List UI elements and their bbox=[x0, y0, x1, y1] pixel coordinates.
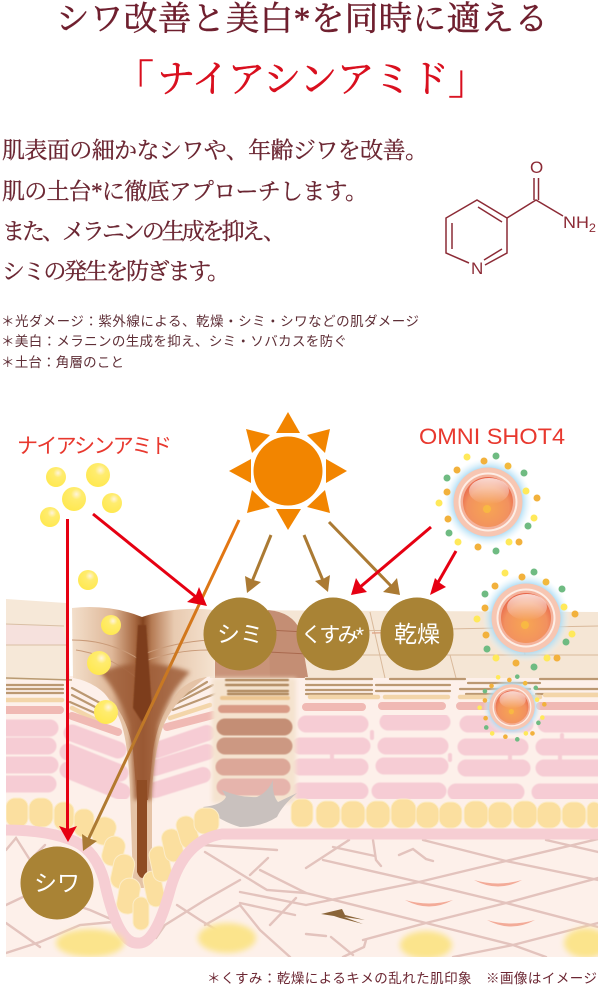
circle: シワ bbox=[20, 846, 94, 920]
footer note: ＊くすみ：乾燥によるキメの乱れた肌印象 ※画像はイメージ bbox=[207, 971, 597, 986]
subtitle: ナイアシンアミド: 「 bbox=[113, 57, 154, 103]
horny layer cells left bbox=[6, 599, 72, 680]
arrow: sun to くすみ bbox=[304, 535, 330, 592]
body text: また、メラニンの生成を抑え、 bbox=[2, 219, 286, 244]
circle: 乾燥 bbox=[380, 598, 454, 670]
molecule diagram: nicotinamide bbox=[446, 158, 596, 278]
circle: シミ: シミ bbox=[217, 621, 263, 647]
footnotes: ＊土台：角層のこと bbox=[1, 355, 124, 370]
skin cross-section illustration bbox=[0, 599, 608, 959]
gray dendritic melanocyte bbox=[203, 780, 297, 827]
body text: 肌の土台*に徹底アプローチします。 bbox=[2, 179, 368, 204]
OMNI SHOT4 particles bbox=[436, 452, 578, 742]
yellow basal cells bbox=[6, 798, 601, 930]
circle: シミ bbox=[204, 598, 276, 670]
molecule diagram: nicotinamide: 2 bbox=[589, 221, 596, 235]
footnotes: ＊光ダメージ：紫外線による、乾燥・シミ・シワなどの肌ダメージ bbox=[1, 314, 419, 329]
arrow: sun to 乾燥 bbox=[329, 522, 400, 595]
footnotes bbox=[1, 314, 419, 370]
arrow: OMNI SHOT4 to くすみ bbox=[351, 527, 431, 595]
title: シワ改善と美白*を同時に適える bbox=[56, 1, 548, 38]
label: ナイアシンアミド: ナイアシンアミド bbox=[17, 435, 172, 458]
tan stripes of the upper epidermis bbox=[6, 679, 598, 732]
body text: シミの発生を防ぎます。 bbox=[2, 259, 230, 284]
molecule diagram: nicotinamide: N bbox=[471, 259, 483, 278]
sun icon bbox=[229, 412, 347, 530]
arrow: sun to シミ bbox=[245, 535, 271, 593]
circle: くすみ: くすみ* bbox=[301, 624, 364, 647]
molecule diagram: nicotinamide: O bbox=[530, 158, 543, 177]
footnotes: ＊美白：メラニンの生成を抑え、シミ・ソバカスを防ぐ bbox=[1, 334, 347, 349]
arrow: sun to シワ bbox=[82, 520, 239, 851]
fat deposits bbox=[56, 923, 608, 959]
arrow: niacinamide to シワ bbox=[59, 519, 77, 842]
dermis fibre network bbox=[6, 835, 598, 957]
dermis pink band bbox=[6, 830, 598, 943]
niacinamide yellow spheres bbox=[40, 463, 122, 724]
salmon crescents bbox=[405, 880, 535, 926]
subtitle: ナイアシンアミド: 」 bbox=[448, 57, 489, 103]
horny layer cells right bbox=[210, 610, 598, 678]
body text: 肌表面の細かなシワや、年齢ジワを改善。 bbox=[2, 138, 428, 163]
circle: 乾燥: 乾燥 bbox=[394, 621, 440, 647]
body text bbox=[2, 138, 428, 284]
pink epidermis cells bbox=[0, 722, 600, 792]
arrow: niacinamide to シミ bbox=[93, 514, 207, 606]
arrow: OMNI SHOT4 to 乾燥 bbox=[430, 551, 456, 595]
pigmented spot: melanin in the cells bbox=[212, 678, 296, 803]
label: OMNI SHOT4: OMNI SHOT4 bbox=[419, 424, 565, 449]
circle: くすみ bbox=[296, 598, 370, 670]
dark hair fragment bbox=[321, 909, 365, 924]
wrinkle groove bbox=[72, 607, 214, 888]
subtitle: ナイアシンアミド: ナイアシンアミド bbox=[157, 59, 449, 101]
circle: シワ: シワ bbox=[34, 870, 80, 896]
molecule diagram: nicotinamide: NH bbox=[563, 213, 588, 232]
